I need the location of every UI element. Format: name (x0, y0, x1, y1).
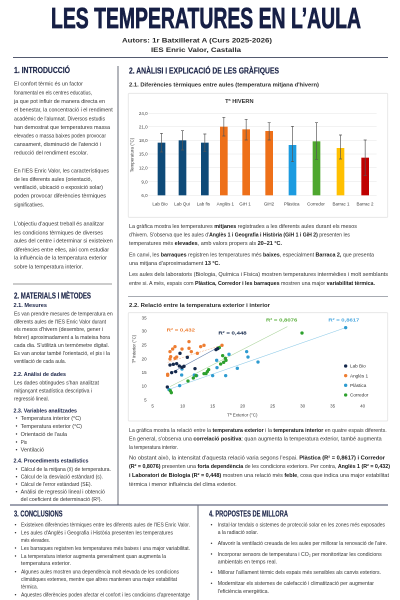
y axis labels: 21,0 (139, 124, 148, 129)
scatter chart: outdoor vs indoor temperature: Tª interior (°C) (131, 334, 136, 363)
subsection 2.4: Anàlisi de regressió lineal i obtenció (21, 490, 105, 496)
conclusions list: tèrmica. (21, 584, 38, 590)
axis titles: Tª Exterior (°C) (227, 413, 258, 418)
subsection 2.2: Les dades obtingudes s'han analitzat (14, 380, 100, 386)
scatter chart: outdoor vs indoor temperature: 15 (210, 404, 216, 409)
chart commentary 2.1: entre si. A més, espais com Plàstica, Corredor i les barraques mostren una major variabilitat tèrmica. (129, 281, 376, 287)
intro text: reducció del rendiment escolar. (14, 151, 88, 157)
heading: conclusions: 3. CONCLUSIONS (14, 510, 63, 518)
intro text: acadèmic de l'alumnat. Diversos estudis (14, 116, 105, 122)
R² labels (167, 318, 360, 336)
conclusions list: climàtiques externes, mentre que altres mantenen una major estabilitat (21, 577, 178, 583)
subsection 2.4 (14, 459, 111, 503)
R² labels: R² = 0,432 (167, 328, 195, 334)
subheading 2.1: 2.1. Diferències tèrmiques entre aules (temperatura mitjana d'hivern) (129, 82, 319, 88)
proposals list: Incorporar sensors de temperatura i CO₂ per monitoritzar les condicions (218, 552, 382, 558)
y axis labels: 24,0 (139, 111, 148, 116)
subsection 2.1: diferents aules de l'IES Enric Valor durant (14, 319, 107, 325)
intro text: diferències entre elles, així com estudiar (14, 248, 109, 254)
conclusions list: Les barraques registren les temperatures més baixes i una major variabilitat. (21, 546, 190, 552)
R² labels: R² = 0,8617 (328, 318, 360, 324)
scatter chart: outdoor vs indoor temperature: 20 (240, 404, 246, 409)
subsection 2.1 (14, 303, 113, 365)
subsection 2.1: 2.1. Mesures (14, 303, 47, 309)
axis tick labels: 25 (142, 343, 147, 348)
axis tick labels (142, 315, 147, 402)
legend: Anglès 1 (350, 373, 369, 378)
intro text (13, 82, 113, 271)
proposals list (211, 522, 387, 595)
subsection 2.2: regressió lineal. (14, 396, 49, 402)
subsection 2.3: Pis (21, 440, 27, 446)
series: Plàstica (167, 326, 347, 391)
heading: materials: 2. MATERIALS I MÈTODES (14, 292, 92, 300)
subsection 2.3: Temperatura interior (°C) (21, 416, 81, 422)
y axis labels: 6,0 (141, 193, 148, 198)
intro text: fonamental en els centres educatius, (14, 90, 92, 96)
x axis labels: GiH2 (264, 202, 275, 207)
subsection 2.3: 2.3. Variables analitzades (14, 409, 77, 415)
intro text: cansament, disminució de l'atenció i (14, 142, 101, 148)
legend (344, 364, 369, 398)
conclusions list: Les aules d'Anglès i Geografia i Història presenten les temperatures (21, 530, 173, 536)
R² labels: R² = 0,448 (218, 330, 247, 336)
subsection 2.4: Càlcul de la desviació estàndard (s). (21, 474, 103, 480)
conclusions list: Aquestes diferències poden afectar el confort i les condicions d'aprenentatge (21, 592, 190, 598)
chart commentary 2.1: una mitjana d'aproximadament 13 °C. (129, 261, 221, 267)
chart commentary 2.2: En general, s'observa una correlació positiva : quan augmenta la temperatura exterior, també augmenta (129, 436, 382, 442)
subsection 2.1: Es van anotar també l'orientació, el pis i la (14, 351, 110, 357)
intro text: L'objectiu d'aquest treball és analitzar (14, 222, 104, 228)
legend: Lab Bio (350, 364, 366, 369)
panel: introduction (13, 66, 113, 271)
series: Corredor (169, 331, 304, 394)
subsection 2.3: Orientació de l'aula (21, 432, 67, 438)
conclusions list (15, 522, 190, 598)
subsection 2.4: 2.4. Procediments estadístics (14, 459, 88, 465)
proposals list: a la radiació solar. (218, 530, 258, 536)
trend lines (168, 327, 346, 389)
scatter chart: outdoor vs indoor temperature: 35 (330, 404, 336, 409)
x axis labels: Barrac 1 (333, 202, 350, 207)
y axis labels: 12,0 (139, 165, 148, 170)
subsection 2.4: Càlcul de la mitjana (x̄) de temperatura. (21, 467, 111, 473)
conclusions list: Existeixen diferències tèrmiques entre les diferents aules de l'IES Enric Valor. (21, 522, 190, 528)
proposals list: Afavorir la ventilació creuada de les aules per millorar la renovació de l'aire. (218, 541, 387, 547)
intro text: significatives. (14, 202, 44, 208)
intro text: la influència de la temperatura exterior (14, 256, 107, 262)
proposals list: Instal·lar tendals o sistemes de protecció solar en les zones més exposades (218, 522, 385, 528)
scatter chart: outdoor vs indoor temperature: 30 (300, 404, 306, 409)
chart commentary 2.1 (129, 224, 388, 287)
R² labels: R² = 0,8076 (266, 318, 298, 324)
bars (158, 127, 369, 195)
chart commentary 2.2: tèrmica i menor influència del clima exterior. (129, 482, 237, 488)
chart commentary 2.2: i Laboratori de Biologia (R² = 0,448) mostren una relació més feble, cosa que indica una major estabilitat (129, 473, 390, 479)
scatter chart: outdoor vs indoor temperature: 10 (180, 404, 186, 409)
subsection 2.1: els mesos d'hivern (desembre, gener i (14, 327, 103, 333)
y axis title: Temperatura (°C) (130, 137, 135, 172)
panel: conclusions (14, 510, 190, 598)
intro text: de les diferents aules (orientació, (14, 177, 92, 183)
intro text: poden provocar diferències tèrmiques (14, 194, 106, 200)
subsection 2.1: ventilació de cada aula. (14, 359, 66, 365)
x axis labels: Lab Bio (152, 202, 168, 207)
bar chart: winter temperature by classroom: Tª HIVERN (225, 98, 254, 105)
legend: Plàstica (350, 383, 367, 388)
proposals list: ambientals en temps real. (218, 560, 277, 566)
conclusions list: més elevades. (21, 538, 50, 544)
chart commentary 2.2: La gràfica mostra la relació entre la temperatura exterior i la temperatura interior en quatre espais diferents. (129, 428, 387, 434)
school: IES Enric Valor, Castalla (151, 47, 241, 54)
intro text: sobre la temperatura interior. (14, 265, 83, 271)
error bars (160, 117, 367, 175)
x axis labels: Anglès 1 (217, 202, 235, 207)
subsection 2.3: Temperatura exterior (°C) (21, 424, 82, 430)
proposals list: l'eficiència energètica. (218, 589, 269, 595)
conclusions list: Algunes aules mostren una dependència molt elevada de les condicions (21, 570, 179, 576)
axis tick labels: 20 (142, 356, 147, 361)
heading: analysis: 2. ANÀLISI I EXPLICACIÓ DE LES GRÀFIQUES (129, 66, 280, 75)
y axis labels: 15,0 (139, 152, 148, 157)
scatter chart: outdoor vs indoor temperature: 40 (360, 404, 366, 409)
x axis labels: Barrac 2 (357, 202, 374, 207)
scatter chart: outdoor vs indoor temperature: 5 (151, 404, 154, 409)
intro text: aules del centre i determinar si existeixen (14, 239, 113, 245)
chart commentary 2.1: temperatures més elevades, amb valors propers als 20–21 °C. (129, 241, 283, 247)
legend: Corredor (350, 393, 369, 398)
axis tick labels: 30 (142, 329, 147, 334)
heading: introduction: 1. INTRODUCCIÓ (14, 66, 70, 75)
subsection 2.3: Ventilació (21, 448, 44, 454)
subsection 2.3 (14, 409, 82, 454)
chart commentary 2.1: En canvi, les barraques registren les temperatures més baixes, especialment Barraca 2, que presenta (129, 252, 374, 258)
intro text: ja que pot influir de manera directa en (13, 99, 105, 105)
x axis labels (152, 202, 374, 207)
chart commentary 2.2: (R² = 0,8076) presenten una forta dependència de les condicions exteriors. Per contra, Anglès 1 (R² = 0,432) (129, 464, 390, 470)
y axis labels: 18,0 (139, 138, 148, 143)
intro text: En l'IES Enric Valor, les característiques (14, 168, 109, 174)
subsection 2.4: Càlcul de l'error estàndard (SE). (21, 482, 92, 488)
x axis labels: Lab fis (197, 202, 211, 207)
axis tick labels: 15 (142, 370, 147, 375)
intro text: han demostrat que temperatures massa (14, 125, 110, 131)
axis tick labels: 10 (142, 384, 147, 389)
series: Lab Bio (166, 347, 219, 389)
series: Anglès 1 (166, 340, 224, 377)
subsection 2.2: mitjançant estadística descriptiva i (14, 388, 92, 394)
subsection 2.1: Es van prendre mesures de temperatura en (14, 311, 113, 317)
x axis labels: Plàstica (284, 202, 300, 207)
subsection 2.2: 2.2. Anàlisi de dades (14, 372, 66, 378)
intro text: ventilació, ubicació o exposició solar) (14, 185, 103, 191)
intro text: el benestar, la concentració i el rendiment (14, 108, 113, 114)
scatter chart: outdoor vs indoor temperature: 25 (270, 404, 276, 409)
panel: improvement proposals (209, 510, 387, 595)
subsection 2.1: cada dia. S'utilitzà un termòmetre digital. (14, 343, 109, 349)
chart commentary 2.2 (129, 428, 390, 488)
x axis labels: Corredor (307, 202, 325, 207)
subsection 2.2 (14, 372, 100, 402)
panel: materials and methods (14, 292, 113, 503)
intro text: les condicions tèrmiques de diverses (14, 230, 103, 236)
scatter chart: outdoor vs indoor temperature (128, 313, 388, 421)
conclusions list: temperatura exterior. (21, 561, 71, 567)
subsection 2.4: del coeficient de determinació (R²). (21, 497, 102, 503)
chart commentary 2.1: La gràfica mostra les temperatures mitjanes registrades a les diferents aules durant els mesos (129, 224, 357, 230)
x axis labels: Lab Qui (174, 202, 190, 207)
intro text: El confort tèrmic és un factor (14, 82, 83, 88)
chart commentary 2.2: No obstant això, la intensitat d'aquesta relació varia segons l'espai. Plàstica (R² = 0,8617) i Corredor (129, 456, 385, 462)
heading: proposals: 4. PROPOSTES DE MILLORA (209, 510, 288, 518)
subheading 2.2: 2.2. Relació entre la temperatura exterior i interior (129, 303, 270, 309)
authors: Autors: 1r Batxillerat A (Curs 2025-2026) (122, 37, 272, 44)
axis tick labels: 5 (144, 397, 147, 402)
chart commentary 2.2: la temperatura interior. (129, 445, 178, 451)
chart commentary 2.1: Les aules dels laboratoris (Biologia, Química i Física) mostren temperatures intermèdies i molt semblants (129, 272, 388, 278)
y axis labels: 9,0 (141, 179, 148, 184)
chart commentary 2.1: d'hivern. S'observa que les aules d'Anglès 1 i Geografia i Història (GiH 1 i GiH 2) presenten les (129, 232, 350, 238)
subsection 2.1: febrer) aproximadament a la mateixa hora (14, 335, 110, 341)
conclusions list: La temperatura interior augmenta generalment quan augmenta la (21, 554, 166, 560)
intro text: elevades o massa baixes poden provocar (14, 133, 106, 139)
y axis labels (139, 111, 148, 198)
axis tick labels: 35 (142, 315, 147, 320)
header (51, 3, 361, 54)
bar chart: winter temperature by classroom (128, 93, 388, 217)
proposals list: Millorar l'aïllament tèrmic dels espais més sensibles als canvis exteriors. (218, 570, 381, 576)
x axis labels: GiH 1 (239, 202, 251, 207)
proposals list: Modernitzar els sistemes de calefacció i climatització per augmentar (218, 581, 374, 587)
